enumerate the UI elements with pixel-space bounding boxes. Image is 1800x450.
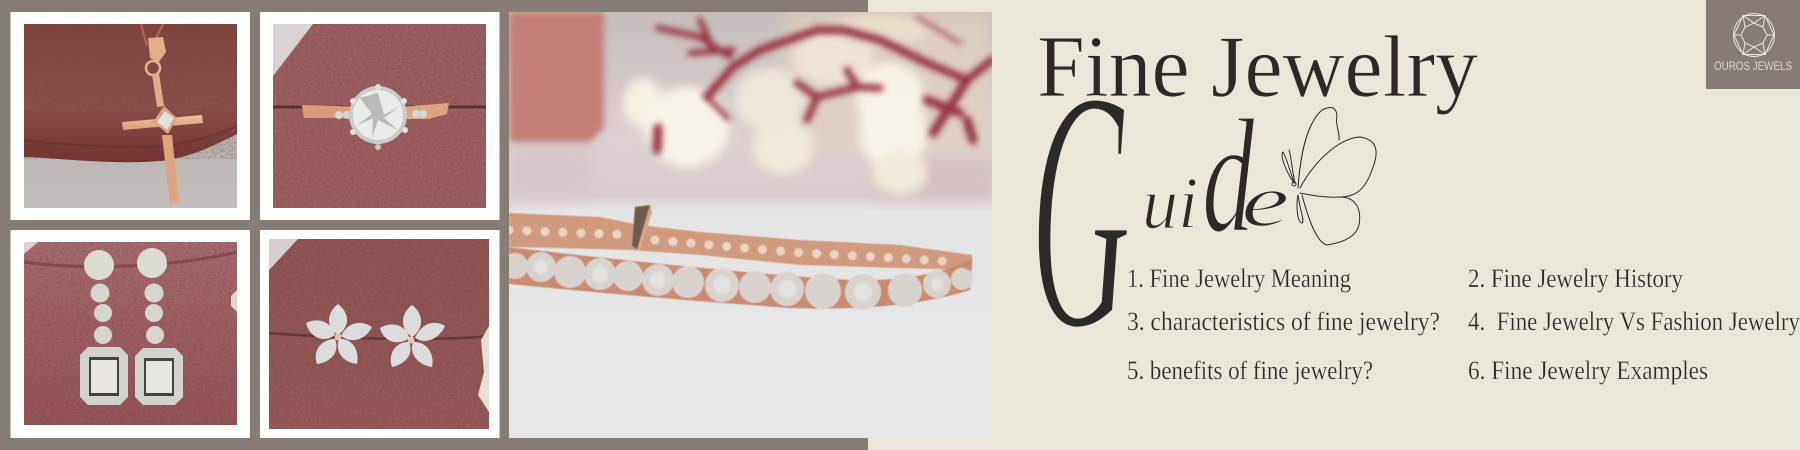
list item 3: 3. characteristics of fine jewelry? [1127,307,1440,336]
heading: Guide in tall script-style lettering: d [1202,85,1254,267]
icon: right flower stud [380,305,445,367]
list item 1: 1. Fine Jewelry Meaning [1127,264,1351,293]
icon: ring with round diamond [302,84,449,150]
panel: cream content background [868,0,1800,450]
icon: bracelet back row [509,205,972,270]
icon: oval diamond logo [1734,14,1774,56]
panel: drop earrings photo [10,230,250,438]
heading: Guide in tall script-style lettering: ui [1142,162,1198,244]
icon: cross pendant [122,37,203,204]
heading: Guide in tall script-style lettering [1030,19,1289,402]
icon: line-art butterfly [1282,108,1376,245]
icon: blurred coral branches [657,17,992,150]
panel: solitaire ring photo [260,12,500,220]
title: Fine Jewelry: Fine Jewelry [1037,19,1478,116]
list item 2: 2. Fine Jewelry History [1468,264,1683,293]
panel: tennis bracelet photo [502,12,992,438]
heading: Guide in tall script-style lettering: e [1241,160,1289,242]
list: guide contents [1127,264,1800,385]
heading: Guide in tall script-style lettering: G [1030,19,1131,402]
icon: right drop earring [135,248,183,405]
panel: flower stud earrings photo [260,230,500,438]
background: taupe band [0,0,868,450]
list item 6: 6. Fine Jewelry Examples [1468,356,1708,385]
logo box: Ouros Jewels [1706,0,1800,89]
panel: pendant photo [10,12,250,220]
icon: left flower stud [306,304,372,364]
icon: bracelet front row of diamonds [502,247,973,310]
list item 5: 5. benefits of fine jewelry? [1127,356,1373,385]
icon: left drop earring [80,250,128,405]
